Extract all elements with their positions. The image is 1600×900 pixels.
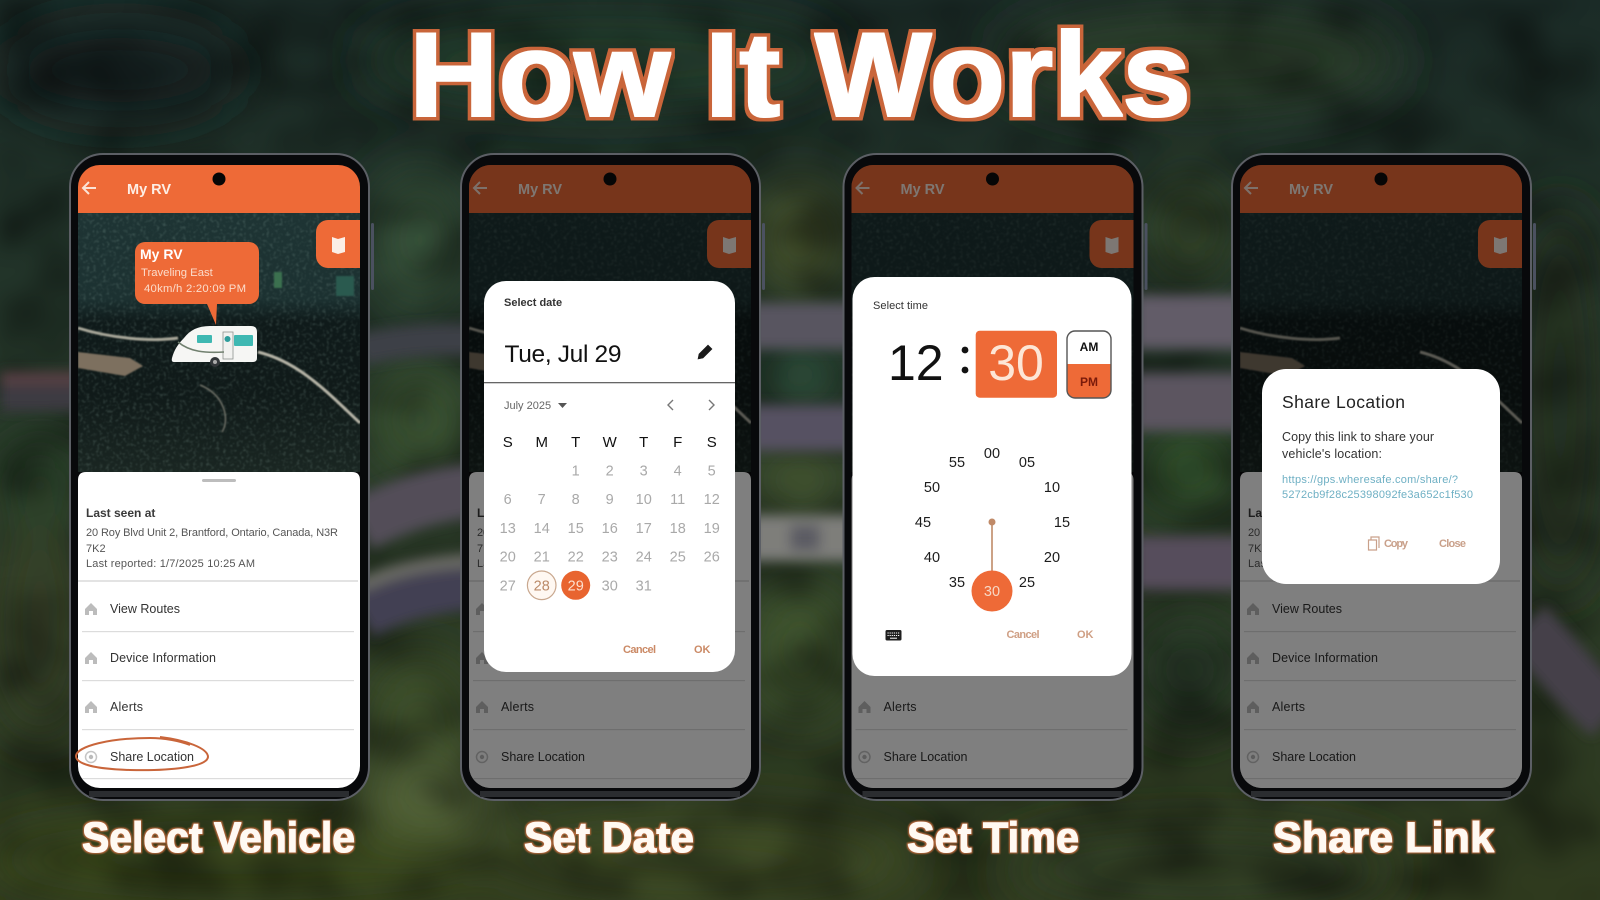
bottom sheet: Alerts xyxy=(884,700,916,714)
bottom sheet: View Routes xyxy=(1272,602,1342,616)
satellite map xyxy=(852,213,1134,472)
satellite map xyxy=(1240,213,1522,472)
calendar dates: 6 xyxy=(504,492,512,508)
date picker dialog: July 2025 xyxy=(504,400,551,412)
bottom sheet: 7K2 xyxy=(1248,543,1268,555)
bottom sheet: Share Location xyxy=(501,750,585,764)
share link: 5272cb9f28c25398092fe3a652c1f530 xyxy=(1282,489,1473,501)
weekday headers: F xyxy=(673,434,682,451)
menu rows: Device Information xyxy=(110,651,216,665)
clock dial: 50 xyxy=(924,480,940,496)
map layers button xyxy=(707,220,751,268)
calendar dates: 26 xyxy=(704,550,720,566)
date picker dialog: Select date xyxy=(504,297,562,309)
date picker dialog xyxy=(484,281,735,672)
phone: set date xyxy=(461,154,767,800)
phone: select vehicle xyxy=(70,154,376,800)
calendar dates: 14 xyxy=(534,521,550,537)
time picker dialog: Cancel xyxy=(1006,629,1040,641)
app bar xyxy=(852,165,1134,213)
date picker dialog: Cancel xyxy=(623,644,656,656)
share link: https://gps.wheresafe.com/share/? xyxy=(1282,474,1458,486)
camera xyxy=(604,172,616,186)
vehicle callout: 40km/h 2:20:09 PM xyxy=(144,283,246,295)
bottom sheet: Device Information xyxy=(1272,651,1378,665)
camera xyxy=(986,172,999,186)
calendar dates: 2 xyxy=(606,464,614,480)
menu rows: Alerts xyxy=(110,700,143,714)
clock dial xyxy=(915,446,1070,612)
app bar xyxy=(1240,165,1522,213)
clock dial: 00 xyxy=(984,446,1000,462)
vehicle callout: My RV xyxy=(140,246,183,262)
calendar dates: 11 xyxy=(670,492,685,508)
bottom sheet xyxy=(469,472,751,788)
last seen block: Last reported: 1/7/2025 10:25 AM xyxy=(86,558,255,570)
app bar xyxy=(469,165,751,213)
weekday headers: S xyxy=(707,434,717,451)
last seen block: 20 Roy Blvd Unit 2, Brantford, Ontario, Canada, N3R xyxy=(86,527,338,539)
camera xyxy=(1374,172,1388,186)
clock dial: 10 xyxy=(1044,480,1060,496)
hour: 12 xyxy=(888,335,944,391)
clock dial: 05 xyxy=(1019,455,1035,471)
calendar dates: 1 xyxy=(572,464,580,480)
bottom sheet: Device Information xyxy=(501,651,607,665)
calendar dates: 8 xyxy=(572,492,580,508)
map layers button xyxy=(316,220,360,268)
clock dial: 55 xyxy=(949,455,965,471)
share location dialog: vehicle's location: xyxy=(1282,447,1382,461)
icon: month chevrons xyxy=(668,400,714,410)
icon: keyboard xyxy=(886,630,902,640)
phone frame xyxy=(70,154,374,800)
clock dial: 40 xyxy=(924,550,940,566)
weekday headers: W xyxy=(603,434,618,451)
caption: select vehicle: Select Vehicle xyxy=(82,814,355,862)
share link xyxy=(1282,474,1473,501)
title: How It Works xyxy=(409,8,1191,142)
calendar dates: 29 xyxy=(568,578,584,594)
bottom sheet xyxy=(852,472,1134,788)
satellite map xyxy=(469,213,751,472)
clock dial: 20 xyxy=(1044,550,1060,566)
bottom sheet: 20 Roy Blvd Unit 2, Brantford, Ontario, Canada, N3R xyxy=(1248,527,1500,539)
time picker dialog: OK xyxy=(1077,629,1094,641)
calendar dates: 10 xyxy=(636,492,652,508)
calendar dates: 16 xyxy=(602,521,618,537)
calendar dates: 28 xyxy=(534,578,550,594)
time picker dialog: Select time xyxy=(873,300,928,312)
phone: set time xyxy=(844,154,1150,800)
menu rows xyxy=(82,602,354,779)
phone frame xyxy=(1232,154,1536,800)
app bar: My RV xyxy=(1289,182,1333,198)
menu rows: Share Location xyxy=(110,750,194,764)
calendar dates: 23 xyxy=(602,550,618,566)
caption: share link: Share Link xyxy=(1273,814,1494,862)
icon: copy xyxy=(1368,537,1379,550)
calendar dates: 18 xyxy=(670,521,686,537)
weekday headers: M xyxy=(535,434,548,451)
caption: set date: Set Date xyxy=(524,814,694,862)
last seen block: Last seen at xyxy=(86,506,155,520)
icon: RV trailer xyxy=(172,326,257,367)
date picker dialog: Tue, Jul 29 xyxy=(504,341,622,368)
minute box xyxy=(976,331,1057,398)
bottom sheet: 7K2 xyxy=(477,543,497,555)
vehicle callout xyxy=(135,242,259,325)
clock dial: 30 xyxy=(984,584,1000,600)
calendar dates: 5 xyxy=(708,464,716,480)
AM PM toggle xyxy=(1067,331,1111,398)
calendar dates: 7 xyxy=(538,492,546,508)
weekday headers: T xyxy=(571,434,580,451)
map layers button xyxy=(1090,220,1134,268)
modal scrim xyxy=(1240,165,1522,788)
calendar dates: 9 xyxy=(606,492,614,508)
AM PM toggle: PM xyxy=(1080,375,1098,389)
bottom sheet: Alerts xyxy=(501,700,534,714)
weekday headers xyxy=(503,434,717,451)
bottom sheet: Last seen at xyxy=(477,506,546,520)
last seen block: 7K2 xyxy=(86,543,106,555)
bottom sheet: Share Location xyxy=(1272,750,1356,764)
bottom sheet xyxy=(1240,472,1522,788)
clock dial: 35 xyxy=(949,575,965,591)
vehicle callout: Traveling East xyxy=(141,267,214,279)
calendar dates: 13 xyxy=(500,521,516,537)
icon: pencil xyxy=(698,345,712,359)
calendar dates: 24 xyxy=(636,550,652,566)
bottom sheet: Last seen at xyxy=(1248,506,1317,520)
icon: back arrow xyxy=(83,182,96,194)
app bar: My RV xyxy=(127,182,171,198)
calendar dates: 30 xyxy=(602,578,618,594)
minute box: 30 xyxy=(988,335,1044,391)
bottom sheet: 20 Roy Blvd Unit 2, Brantford, Ontario, Canada, N3R xyxy=(477,527,729,539)
app bar: My RV xyxy=(518,182,562,198)
camera xyxy=(212,172,226,186)
map layers button xyxy=(1478,220,1538,268)
time picker dialog xyxy=(852,277,1132,676)
share location dialog: Copy this link to share your xyxy=(1282,430,1434,444)
AM PM toggle: AM xyxy=(1080,340,1098,354)
calendar dates: 4 xyxy=(674,464,682,480)
modal scrim xyxy=(469,165,751,788)
bottom sheet xyxy=(78,472,360,788)
menu rows: View Routes xyxy=(110,602,180,616)
calendar dates: 17 xyxy=(636,521,652,537)
caption: set time: Set Time xyxy=(907,814,1079,862)
clock dial: 25 xyxy=(1019,575,1035,591)
last seen block xyxy=(78,506,358,582)
calendar dates: 3 xyxy=(640,464,648,480)
share location highlight oval xyxy=(76,737,208,770)
phone: share link xyxy=(1232,154,1538,800)
share location dialog xyxy=(1262,369,1500,584)
share location dialog: Copy xyxy=(1384,538,1409,550)
calendar dates xyxy=(500,464,720,600)
weekday headers: S xyxy=(503,434,513,451)
separator xyxy=(962,347,968,373)
calendar dates: 15 xyxy=(568,521,584,537)
app bar xyxy=(78,165,360,213)
bottom sheet: Last reported: 1/7/2025 10:25 AM xyxy=(1248,558,1417,570)
calendar dates: 20 xyxy=(500,550,516,566)
calendar dates: 25 xyxy=(670,550,686,566)
calendar dates: 27 xyxy=(500,578,516,594)
bottom sheet: Share Location xyxy=(884,750,968,764)
calendar dates: 22 xyxy=(568,550,584,566)
phone frame xyxy=(461,154,765,800)
bottom sheet: View Routes xyxy=(501,602,571,616)
weekday headers: T xyxy=(639,434,648,451)
calendar dates: 12 xyxy=(704,492,720,508)
clock dial: 45 xyxy=(915,515,931,531)
bottom sheet: Alerts xyxy=(1272,700,1305,714)
modal scrim xyxy=(852,165,1134,788)
calendar dates: 19 xyxy=(704,521,720,537)
date picker dialog: OK xyxy=(694,644,711,656)
calendar dates: 31 xyxy=(636,578,652,594)
bottom sheet: Last reported: 1/7/2025 10:25 AM xyxy=(477,558,646,570)
phone frame xyxy=(844,154,1148,800)
clock dial: 15 xyxy=(1054,515,1070,531)
share location dialog: Close xyxy=(1439,538,1466,550)
share location dialog: Share Location xyxy=(1282,392,1405,412)
calendar dates: 21 xyxy=(534,550,550,566)
satellite map xyxy=(78,213,360,472)
app bar: My RV xyxy=(900,182,945,198)
